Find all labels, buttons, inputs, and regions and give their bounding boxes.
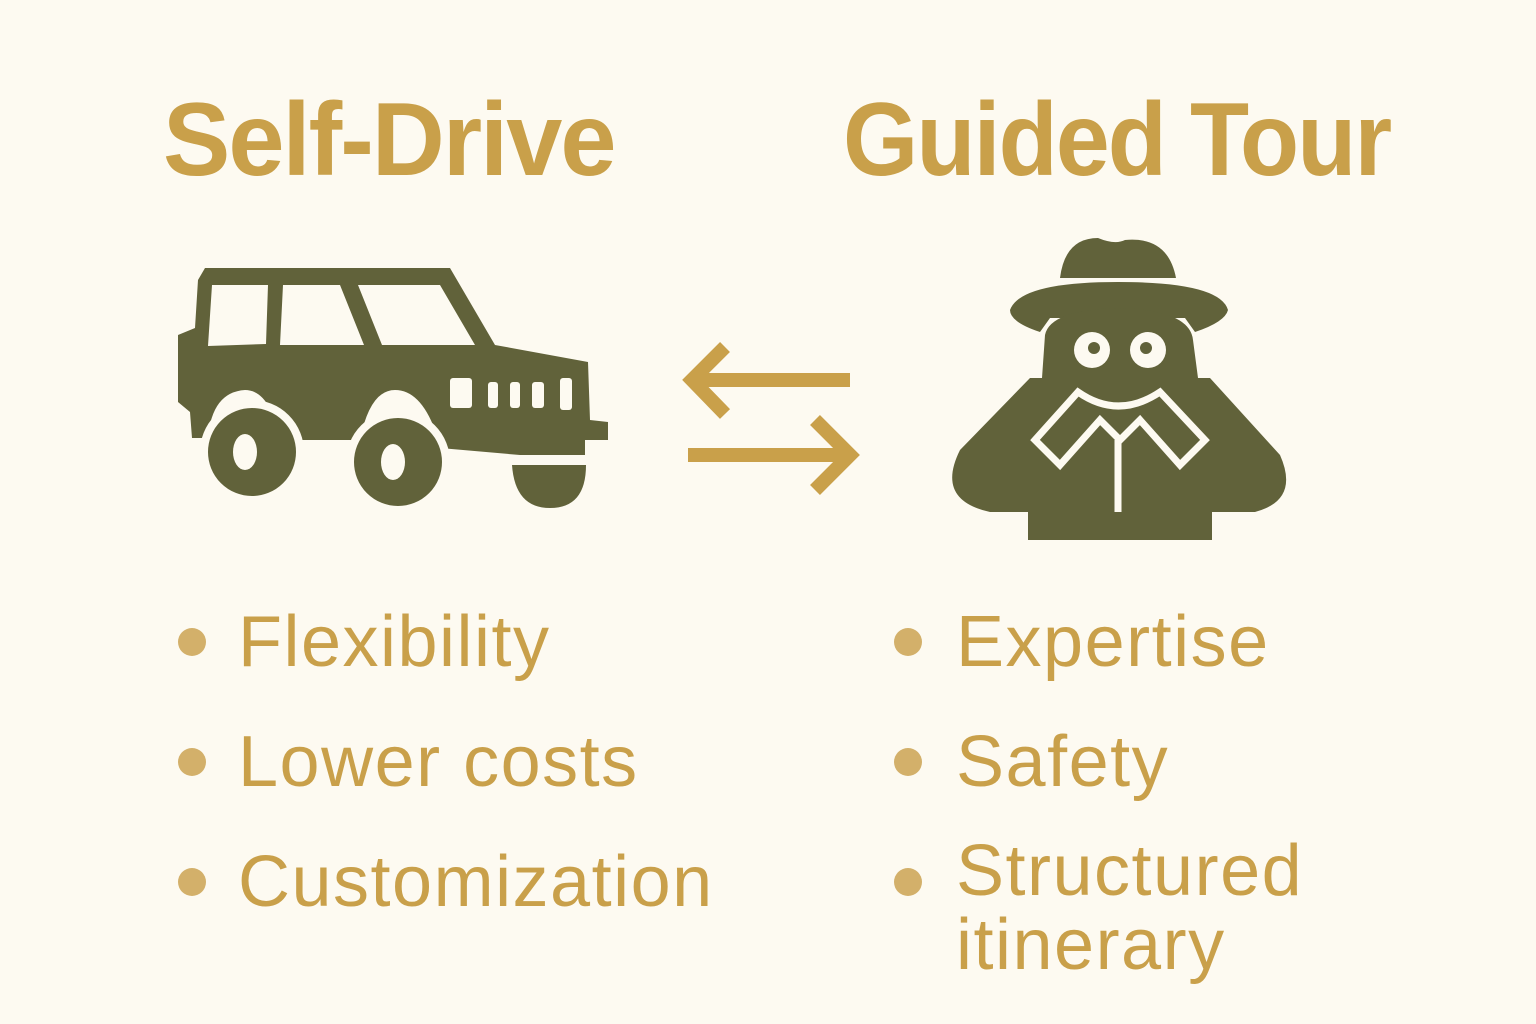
bullet: Expertise [894, 602, 1270, 682]
bullet: Safety [894, 722, 1169, 802]
icon: car [178, 268, 608, 508]
icon: guide [952, 238, 1286, 540]
bullet: Lower costs [178, 722, 639, 802]
list: self-drive benefits: Lower costs [238, 722, 639, 802]
bullet: Customization [178, 842, 714, 922]
list: guided tour benefits: Structured [956, 831, 1303, 911]
list: self-drive benefits: Customization [238, 842, 714, 922]
title: Self-Drive: Self-Drive [163, 82, 615, 198]
list: self-drive benefits: Flexibility [238, 602, 551, 682]
list: guided tour benefits: Safety [956, 722, 1169, 802]
icon: arrows [682, 342, 860, 495]
list: guided tour benefits: Expertise [956, 602, 1270, 682]
bullet: Structured itinerary [894, 831, 1303, 985]
title: Guided Tour: Guided Tour [843, 82, 1390, 198]
list: guided tour benefits [894, 602, 1303, 985]
list: self-drive benefits [178, 602, 714, 922]
list: guided tour benefits: itinerary [956, 905, 1226, 985]
bullet: Flexibility [178, 602, 551, 682]
